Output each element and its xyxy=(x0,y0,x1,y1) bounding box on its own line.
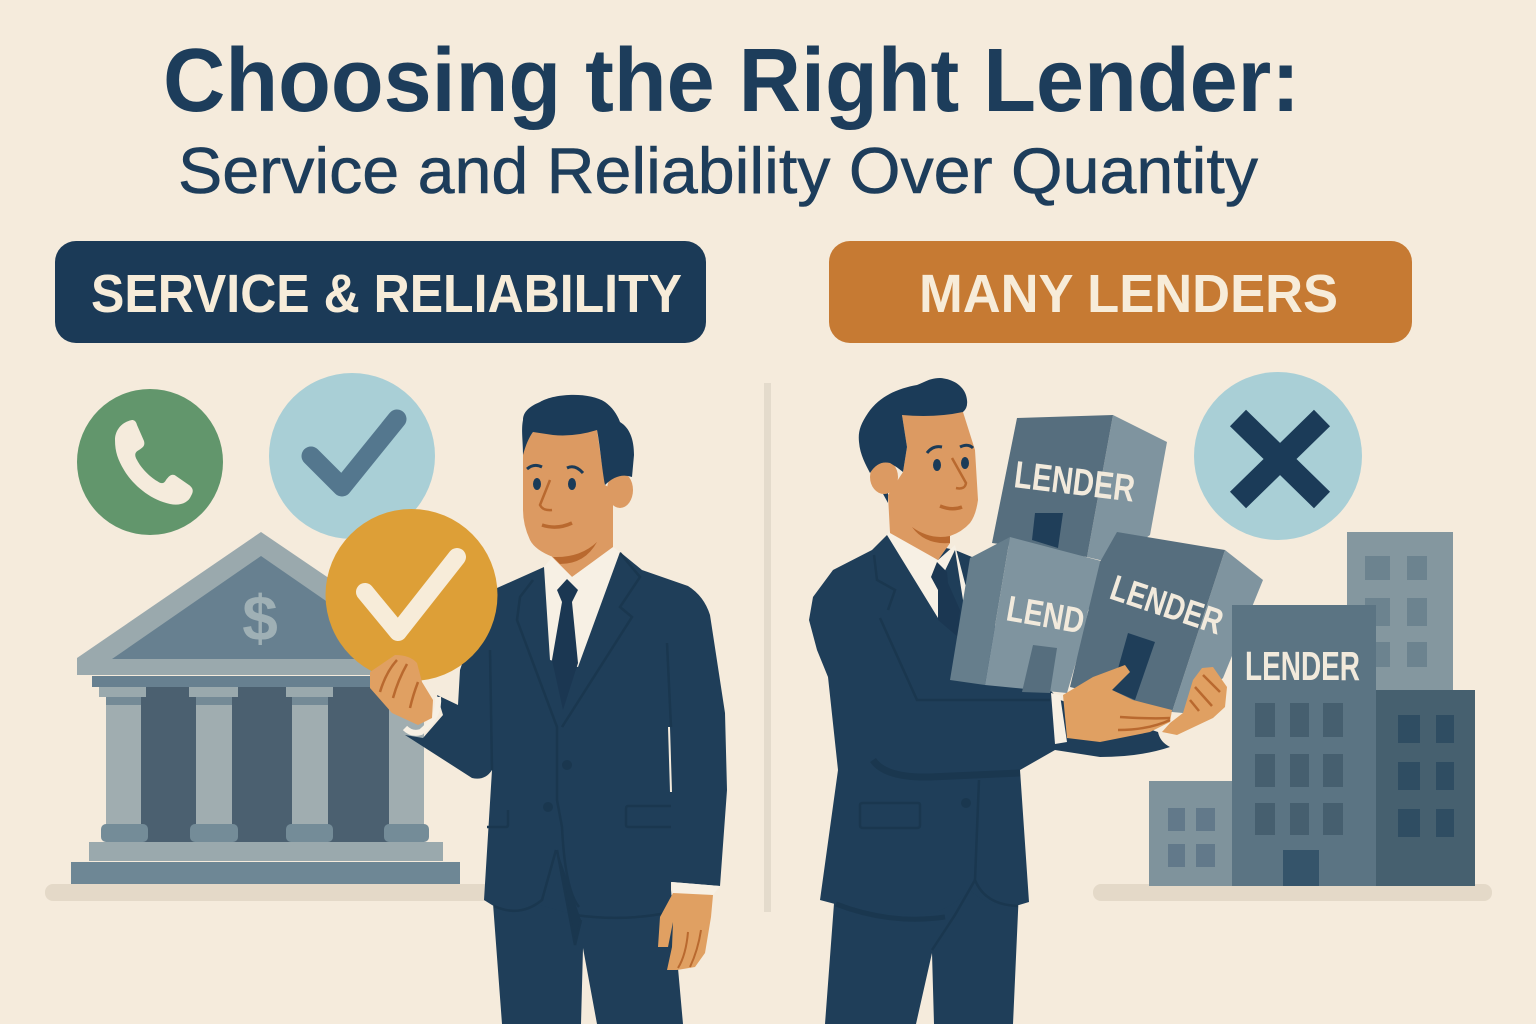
main lender building xyxy=(1232,605,1376,886)
tie xyxy=(931,562,960,637)
right dark building xyxy=(1376,690,1475,886)
shirt cuff lower xyxy=(672,882,720,895)
suit details xyxy=(487,553,671,945)
suit details xyxy=(836,555,1050,950)
trousers xyxy=(492,890,683,1024)
panel heading: service and reliability: SERVICE & RELIABILITY xyxy=(91,264,682,324)
icon: blue check xyxy=(269,373,435,539)
raised hand xyxy=(370,655,433,725)
subtitle: Service and Reliability Over Quantity xyxy=(178,134,1258,207)
panel heading: many lenders: MANY LENDERS xyxy=(919,264,1338,324)
front right lender building: LENDER xyxy=(1105,567,1228,642)
hair back xyxy=(870,470,888,503)
panel heading: service and reliability xyxy=(55,241,706,343)
person: left businessman xyxy=(326,395,727,1024)
main heading: Choosing the Right Lender: xyxy=(163,31,1300,131)
raised check badge xyxy=(326,509,498,681)
shirt cuff xyxy=(1051,693,1067,744)
lowered hand xyxy=(658,893,713,970)
hair xyxy=(522,395,634,485)
roof xyxy=(77,532,420,675)
collar xyxy=(887,530,972,618)
icon: bank building xyxy=(71,532,460,884)
tie xyxy=(552,579,578,710)
dollar sign: $ xyxy=(242,582,278,654)
main lender building: LENDER xyxy=(1245,643,1360,689)
icon: phone xyxy=(77,389,223,535)
back lender building: LENDER xyxy=(1012,454,1137,511)
back lender building xyxy=(992,415,1167,563)
large hand xyxy=(1063,665,1172,742)
title xyxy=(163,31,1300,207)
ear xyxy=(870,460,898,494)
trousers xyxy=(825,890,1019,1024)
face xyxy=(888,412,978,560)
icon: cross xyxy=(1194,372,1362,540)
tall back building xyxy=(1347,532,1453,690)
facial features xyxy=(912,445,973,543)
front left lender building xyxy=(950,537,1127,693)
panel heading: many lenders xyxy=(829,241,1412,343)
ear xyxy=(607,472,633,508)
small left building xyxy=(1149,781,1232,886)
columns xyxy=(99,687,429,842)
shirt cuff xyxy=(405,697,438,733)
facial features xyxy=(527,465,597,564)
city buildings xyxy=(1149,532,1475,886)
collar xyxy=(544,547,620,667)
neck xyxy=(552,500,613,577)
neck xyxy=(890,500,950,560)
jacket xyxy=(405,552,727,918)
pediment xyxy=(112,556,410,659)
front right lender building xyxy=(1070,532,1263,713)
small hand xyxy=(1162,667,1227,735)
person: right businessman with lender buildings xyxy=(809,378,1263,1024)
face xyxy=(523,430,613,557)
jacket xyxy=(809,535,1170,915)
front left lender building: LENDER xyxy=(1004,588,1127,648)
hair xyxy=(859,378,967,473)
